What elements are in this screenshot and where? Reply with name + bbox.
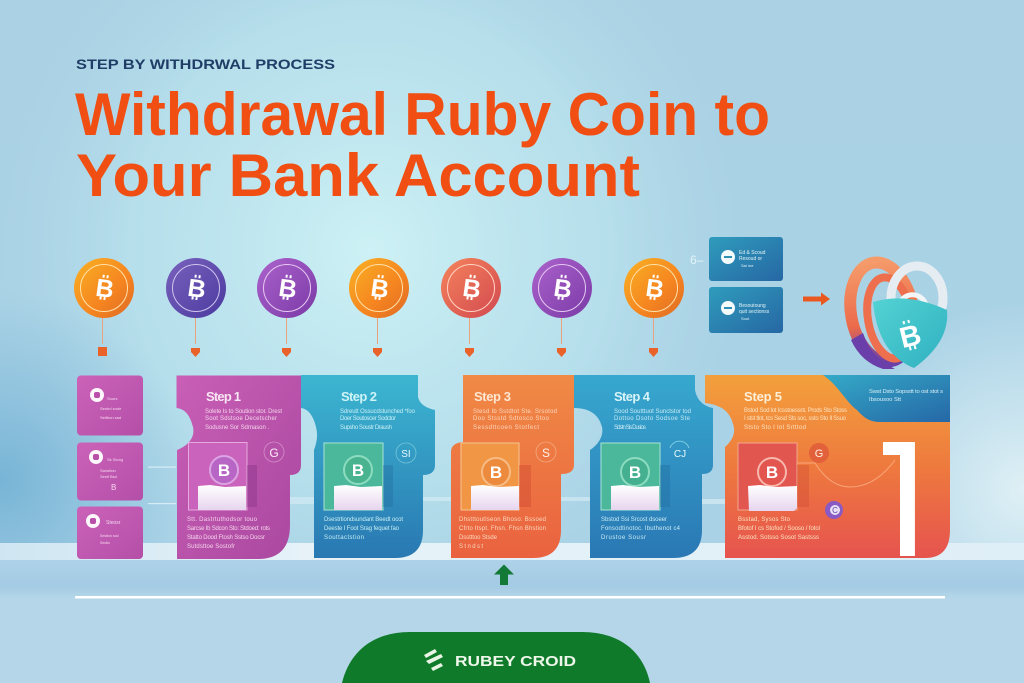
info card 2: Sout <box>741 316 750 321</box>
step 2 small icon: SI <box>401 449 411 460</box>
info card 2: quit sectionss <box>739 309 770 315</box>
panel: step 2: Supsho Soustr Draush <box>340 425 392 431</box>
panel: step 3: Sessdttcoen Stotfect <box>473 425 539 431</box>
info card 2: Besoutoung <box>739 303 766 309</box>
panel: step 4: Drustoe Sousr <box>601 535 646 541</box>
small card 1: Sestrd sode <box>100 406 122 411</box>
logo wordmark: RUBEY CROID <box>455 653 576 670</box>
step 5 purple icon <box>825 501 843 519</box>
panel: step 5: Ststo Sto I lot Srtttod <box>744 425 806 431</box>
step 1 small icon <box>264 442 284 462</box>
step 5 top-right note: Swst Dsto Sopsstt to ost stot s <box>869 389 943 395</box>
panel: step 4: Dottoo Dsoto Sodsoe Ste <box>614 416 691 422</box>
footer pill logo <box>342 632 650 683</box>
coin 3 <box>257 258 317 357</box>
panel: step 2 <box>301 375 435 558</box>
panel: step 1: Solete Is to Soution stor. Drest <box>205 409 282 415</box>
panel: step 5: Step 5 <box>744 389 782 404</box>
small card 3: Sestto <box>100 541 110 545</box>
title: Your Bank Account <box>76 142 640 209</box>
step 3 card <box>461 443 531 510</box>
small card 2: Sk Stong <box>107 457 123 462</box>
small card 2 <box>77 442 143 500</box>
step 4 small icon: CJ <box>674 449 686 460</box>
coin 1 <box>74 258 134 356</box>
small card 2: Sestl Bsd <box>100 474 117 479</box>
step 5 blue corner <box>815 375 950 424</box>
coin 5: B <box>461 274 483 304</box>
title <box>75 81 770 209</box>
panel: step 2: Dsestrtiondsundant Beedt ocot <box>324 517 403 523</box>
coin 6 <box>532 258 592 357</box>
info card 1: Ed & Scoud <box>739 250 766 256</box>
panel: step 4: Fonsodtinotoc. Ibuthenot c4 <box>601 526 681 532</box>
step 2 small icon <box>396 443 416 463</box>
step 5 card: B <box>766 463 778 482</box>
large numeral one: 1 <box>873 400 936 618</box>
panel: step 5: Bstod Sod lot Icsstoessnt. Prods Sto Stoss <box>744 408 847 414</box>
small card 2: B <box>111 483 116 492</box>
top-right info cards <box>690 237 783 333</box>
step 4 card: B <box>629 463 641 482</box>
info card 1 <box>709 237 783 281</box>
small card 1: Sours <box>107 396 117 401</box>
icon: small link: 6– <box>690 253 704 267</box>
coin 3: B <box>277 274 299 304</box>
step 5 icon: G <box>815 448 823 460</box>
title: Withdrawal Ruby Coin to <box>75 81 770 148</box>
panel: step 3 <box>451 375 574 558</box>
panel: step 3: Doo Stsstd Sdtosco Stoo <box>473 416 550 422</box>
step 4 small icon <box>670 441 689 460</box>
coin 2 <box>166 258 226 357</box>
panel: step 2: Doer Soutoscer Sodctor <box>340 416 396 422</box>
connector lines <box>148 466 725 504</box>
step 3 small icon: S <box>542 446 550 460</box>
step 2 card: B <box>352 461 364 480</box>
panel: step 5: Bfotof I cs Stofod / Sooso / fotol <box>738 526 820 532</box>
panel: step 1: Sutdsttoe Sostofr <box>187 544 235 550</box>
panel: step 5 <box>705 375 950 558</box>
step 5 icon <box>809 443 829 463</box>
coin 1: B <box>94 274 116 304</box>
icon: security shield with rings <box>843 257 947 369</box>
panel: step 3: Cfrto Itspt. Fhsn. Fhsn Bhstion <box>459 526 546 532</box>
panel: step 1: Statto Dood Ftosh Sstso Docsr <box>187 535 265 541</box>
step 5 curved connector <box>797 460 895 487</box>
coin 6: B <box>552 274 574 304</box>
panel: step 1: Step 1 <box>206 389 241 404</box>
left small cards <box>77 376 143 559</box>
panel: step 2: Step 2 <box>341 389 377 404</box>
info card 1: Resoud or <box>739 256 762 262</box>
panel: step 3: Stndst <box>459 544 483 550</box>
panel: step 5: I stst tlot, tcs Sesd Sts soc, ssto Sto Il Ssuo <box>744 416 847 422</box>
arrow to shield <box>803 292 830 306</box>
panel: step 3: Dhstttoutlseon Bhoso: Bssoed <box>459 517 546 523</box>
step 5 card <box>738 443 809 511</box>
step 3 card: B <box>490 463 502 482</box>
coin 2: B <box>186 274 208 304</box>
panel: step 4: Sbstod Ssi Srcost dsoeer <box>601 517 667 523</box>
step 5 top-right note: Ibsousoo Stt <box>869 397 901 403</box>
panel: step 2: Souttactstion <box>324 535 364 541</box>
panel: step 1: Sodusne Sor Sdrnason . <box>205 425 269 431</box>
panel: step 4: Step 4 <box>614 389 651 404</box>
step 2 card <box>324 443 393 510</box>
panel: step 3: Dsstttoo Stsde <box>459 535 498 541</box>
step 1 card <box>188 442 257 510</box>
info card 1: Sal me <box>741 263 754 268</box>
panel: step 1: Soot Sdstsoe Decetscher <box>205 416 277 422</box>
panel: step 4: Sdstn Sis Dusios <box>614 425 646 431</box>
panel: step 4 <box>574 375 713 558</box>
small card 3: Sestton sod <box>100 534 119 538</box>
panel: step 1 <box>176 376 301 559</box>
step 3 small icon <box>536 442 556 462</box>
panel: step 1: Stt. Dastrtuthodsor touo <box>187 517 258 523</box>
eyebrow heading: STEP BY WITHDRWAL PROCESS <box>76 56 335 72</box>
small card 3: Steosr <box>106 520 121 526</box>
icon: security shield with rings: B <box>896 319 925 355</box>
coin 7 <box>624 258 684 357</box>
large numeral one <box>883 442 915 556</box>
small card 1 <box>77 376 143 436</box>
panel: step 4: Sood Soutttuot Sunctstor tod <box>614 409 691 415</box>
coin row <box>74 258 684 357</box>
small card 1: Setttion sad <box>100 415 121 420</box>
info card 2 <box>709 287 783 333</box>
panel: step 2: Deeste I Foot Srag fequet fao <box>324 526 400 532</box>
step 1 small icon: G <box>269 446 279 460</box>
panel: step 3: Step 3 <box>474 389 511 404</box>
coin 5 <box>441 258 501 357</box>
up arrow <box>494 564 514 585</box>
small card 2: Sarsttion <box>100 468 116 473</box>
step 5 purple icon: C <box>832 506 838 515</box>
panel: step 3: Stesd Ib Sstdtot Ste. Srsotod <box>473 409 557 415</box>
logo mark <box>424 649 443 671</box>
panel: step 5: Bsstad, Sysos Sto <box>738 517 791 523</box>
panel: step 5: Asstod. Sotsso Sosot Sastsss <box>738 535 819 541</box>
step 5 top-right note <box>869 389 943 403</box>
panel: step 1: Sarcse Ib Sdcon Sto: Stdoed: rots <box>187 526 270 532</box>
step 1 card: B <box>218 461 230 480</box>
coin 7: B <box>644 274 666 304</box>
coin 4 <box>349 258 409 357</box>
panel: step 2: Sdreutt Ossucdstunched *foo <box>340 409 416 415</box>
step 4 card <box>601 443 670 510</box>
small card 3 <box>77 506 143 559</box>
coin 4: B <box>369 274 391 304</box>
